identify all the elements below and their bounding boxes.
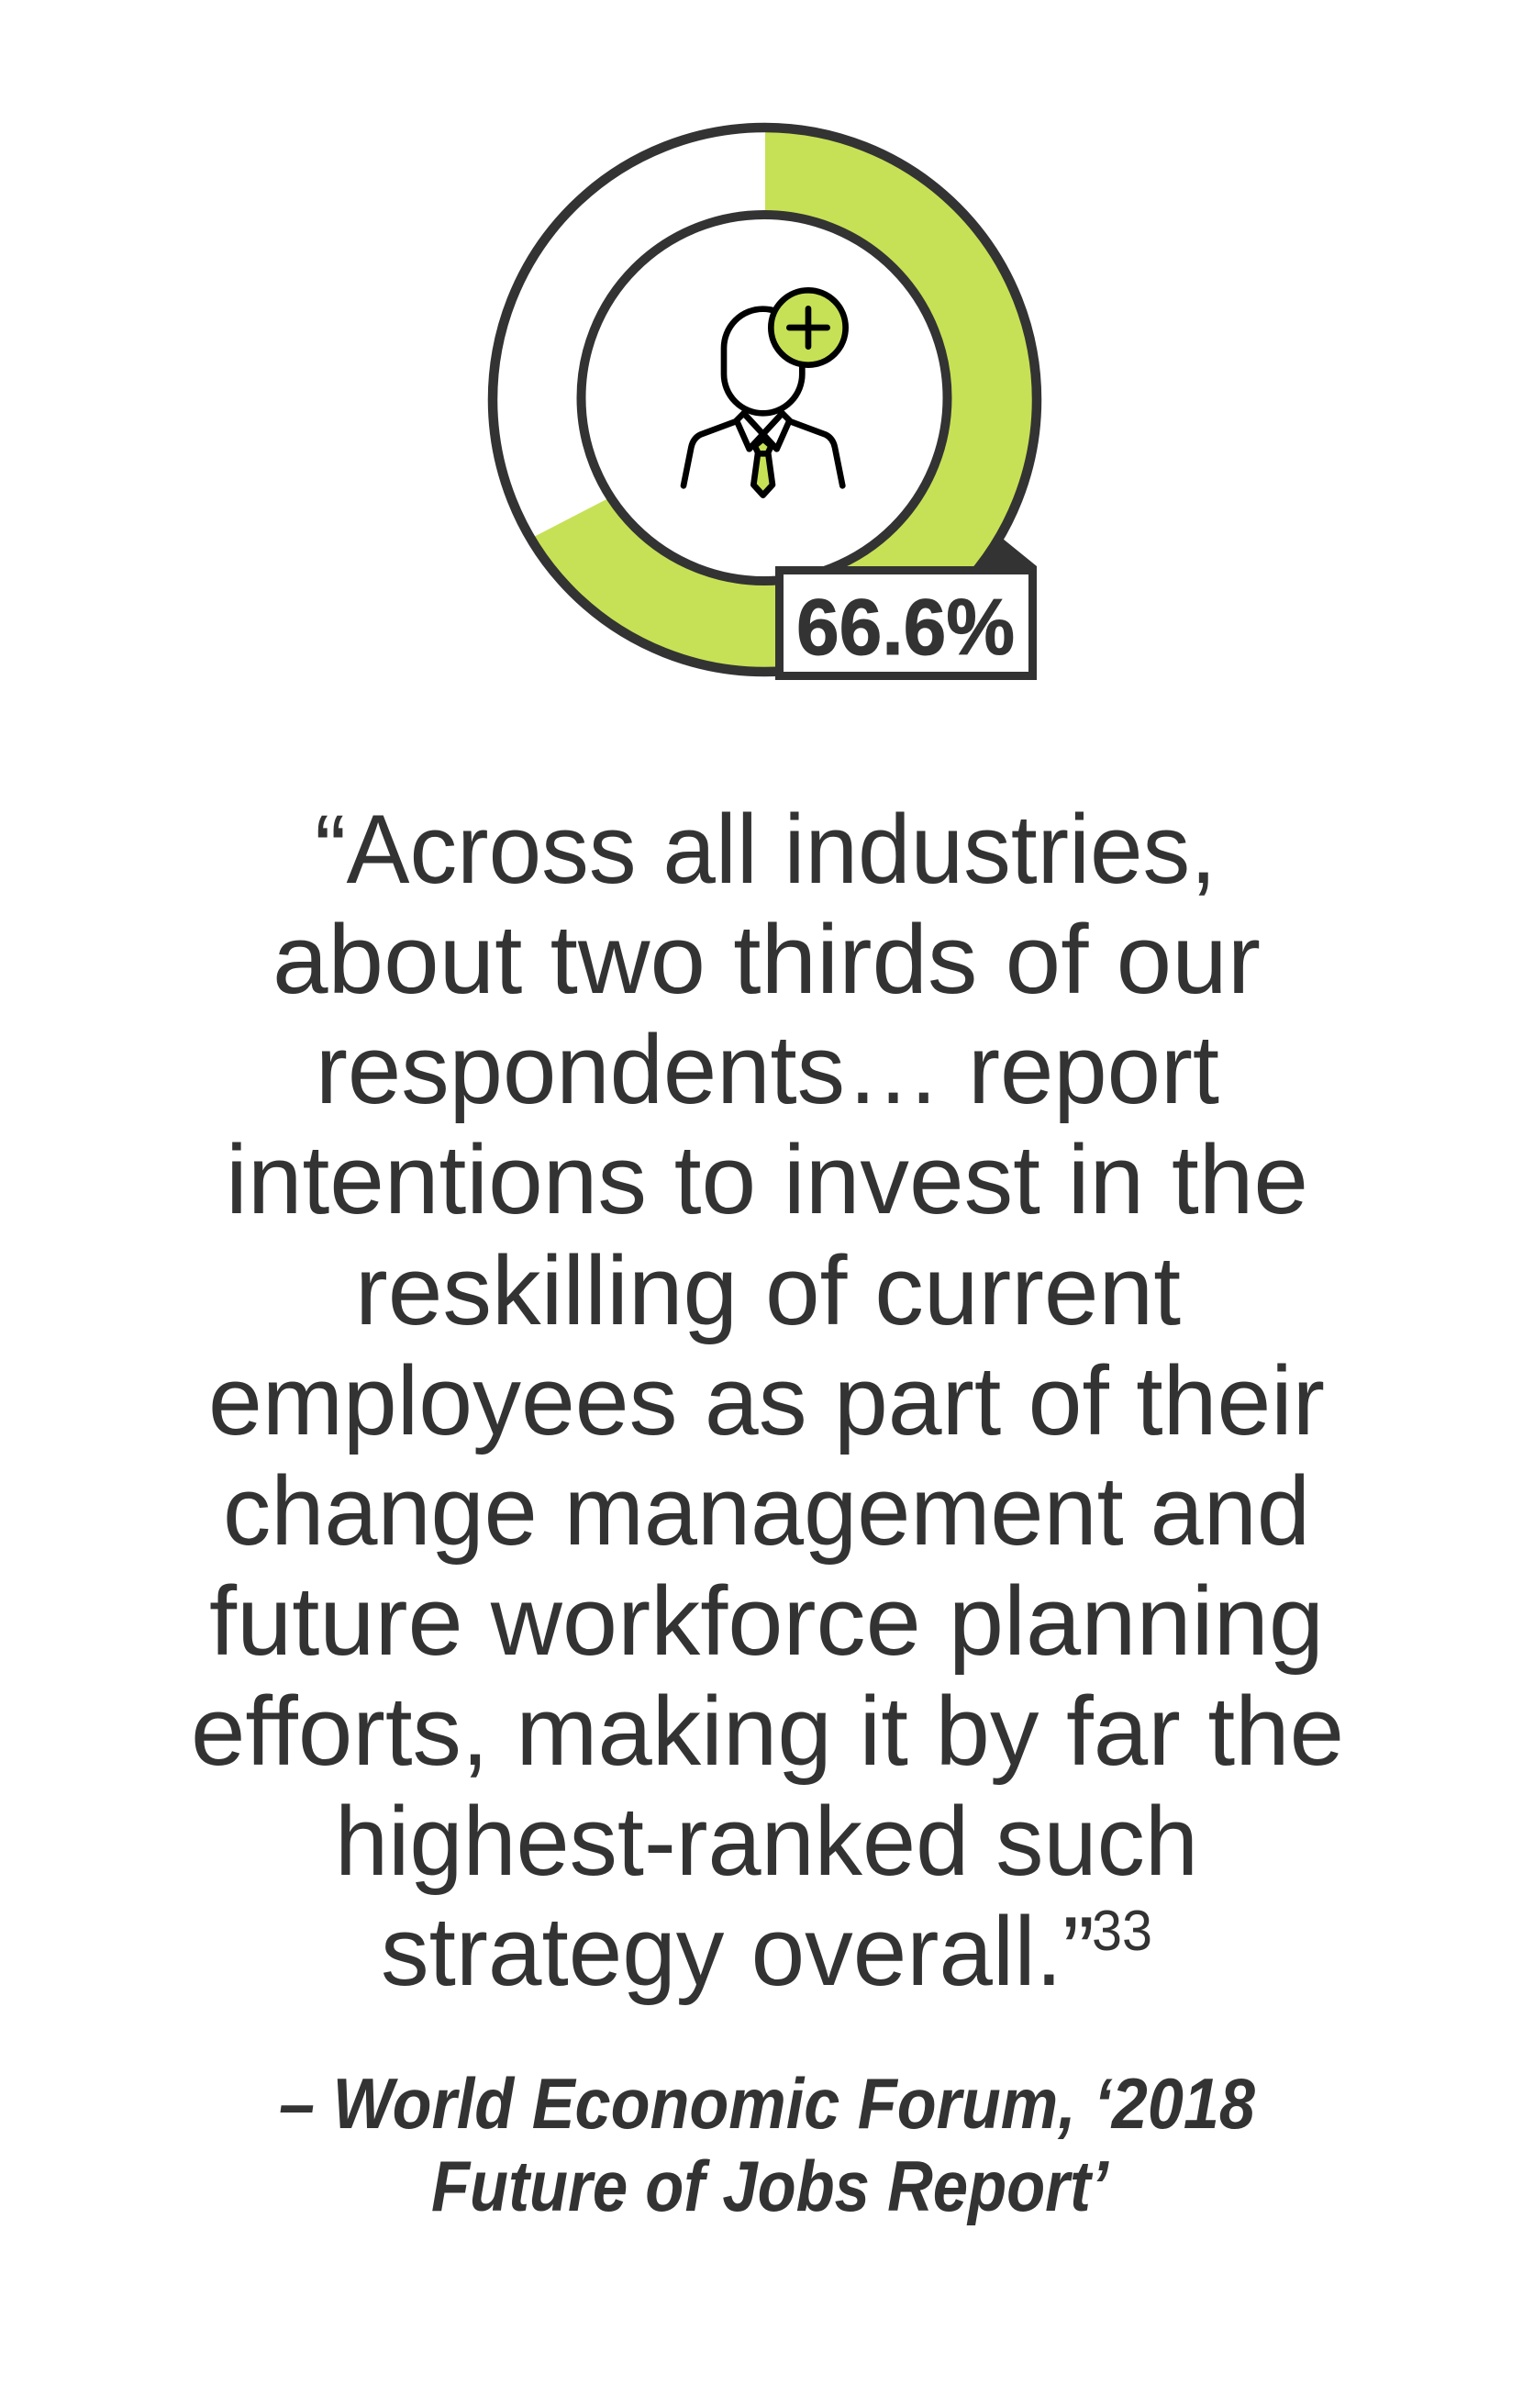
quote text: efforts, making it by far the	[191, 1676, 1344, 1786]
quote text: strategy overall.”	[381, 1896, 1095, 2006]
donut inner ring	[582, 215, 947, 581]
quote text: reskilling of current	[355, 1235, 1181, 1345]
donut green segment	[532, 128, 1038, 672]
quote text: intentions to invest in the	[226, 1124, 1308, 1234]
attribution: Future of Jobs Report’	[431, 2146, 1109, 2226]
callout box	[780, 571, 1033, 675]
quote text: 33	[1092, 1900, 1152, 1963]
shoulders	[684, 413, 842, 485]
attribution	[279, 2063, 1256, 2226]
tie knot	[755, 439, 772, 453]
donut outer ring	[493, 128, 1037, 672]
quote text: “Across all industries,	[315, 794, 1217, 904]
quote text: highest-ranked such	[335, 1786, 1198, 1896]
quote text	[191, 794, 1344, 2006]
tie	[753, 453, 773, 496]
callout value: 66.6%	[796, 584, 1015, 672]
quote text: about two thirds of our	[272, 904, 1261, 1014]
icon: businessperson with plus badge	[684, 290, 846, 496]
plus badge	[771, 290, 846, 365]
plus sign	[789, 308, 828, 347]
quote text: future workforce planning	[209, 1566, 1324, 1676]
head	[724, 309, 802, 413]
collar	[737, 413, 789, 449]
quote text: employees as part of their	[208, 1345, 1325, 1455]
callout: 66.6%	[780, 539, 1037, 675]
quote text: respondents… report	[316, 1014, 1219, 1124]
callout fold triangle	[984, 539, 1037, 566]
quote text: change management and	[223, 1455, 1310, 1566]
donut chart: 66.6%	[493, 128, 1038, 672]
attribution: – World Economic Forum, ‘2018	[279, 2063, 1256, 2144]
